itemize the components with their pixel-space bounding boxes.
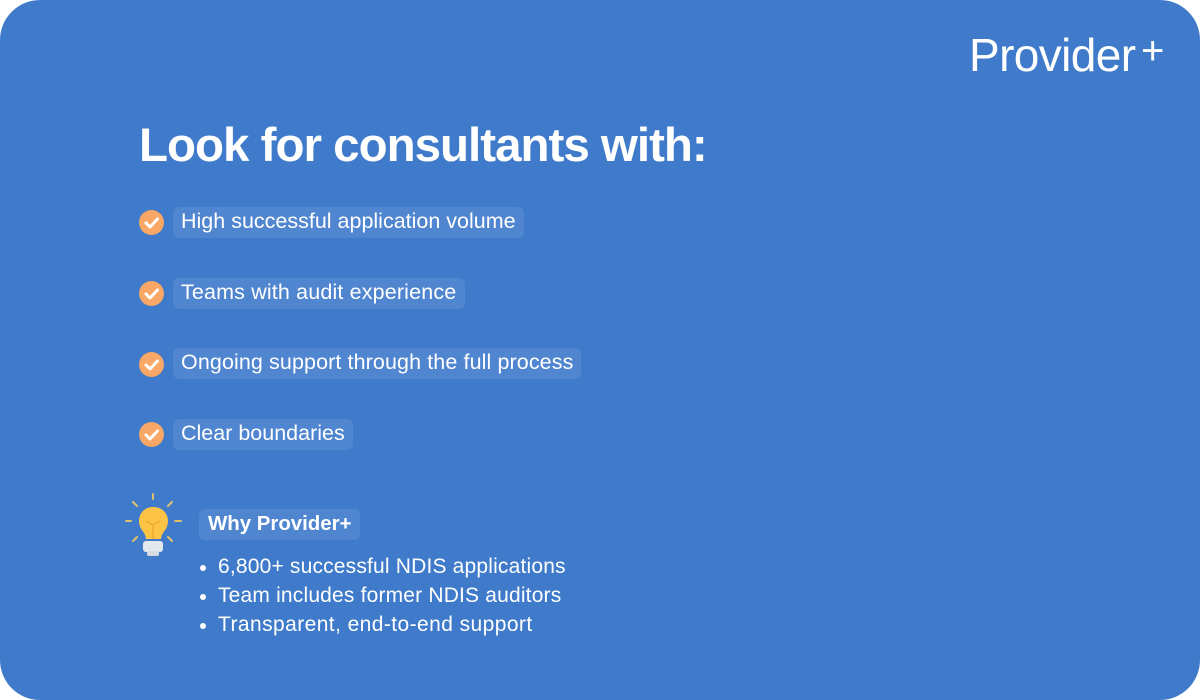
icon: check 4 [139,422,164,447]
bullet 3: Transparent, end-to-end support [218,613,533,636]
item 1: High successful application volume [181,209,516,233]
label: Why Provider+: Why Provider+ [208,512,351,535]
bullet 2: Team includes former NDIS auditors [218,584,561,607]
logo: Provider+: Provider [969,29,1136,81]
item 4: Clear boundaries [181,421,345,445]
icon: light bulb [125,493,182,556]
icon: check 1 [139,210,164,235]
bullet list [200,555,566,636]
checklist [139,207,581,450]
heading: Look for consultants with: [139,119,707,172]
bullet 1: 6,800+ successful NDIS applications [218,555,566,578]
icon: check 3 [139,352,164,377]
item 3: Ongoing support through the full process [181,350,573,374]
logo: Provider+: + [1141,29,1164,73]
icon: check 2 [139,281,164,306]
label: Why Provider+ [199,509,360,540]
item 2: Teams with audit experience [181,280,456,304]
